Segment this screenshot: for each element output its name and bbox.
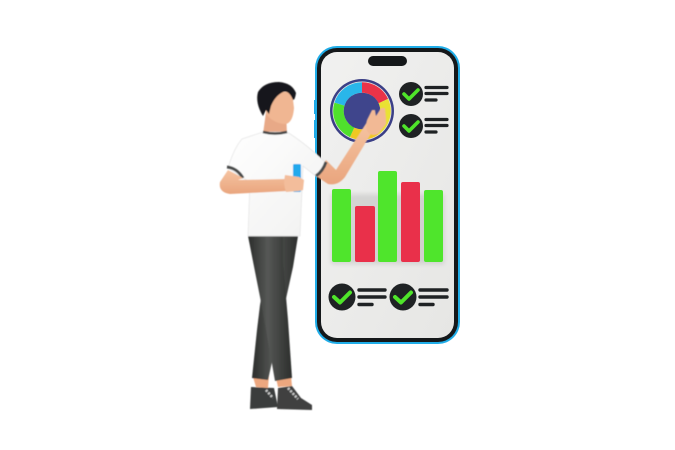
folded arm (220, 170, 288, 194)
phone (314, 46, 460, 344)
back shoe (250, 387, 278, 409)
ankles (253, 375, 292, 388)
check item: top two (399, 114, 447, 138)
phone screen (321, 52, 454, 338)
check item: bottom left (328, 284, 385, 310)
sleeve cuffs (227, 162, 326, 178)
raised hand (366, 108, 386, 135)
small phone in hand (293, 164, 301, 192)
bar shadows (331, 194, 444, 264)
phone black bezel (317, 48, 458, 342)
phone blue case (315, 46, 460, 344)
hair (257, 82, 296, 116)
holding hand (284, 175, 304, 192)
donut segments (338, 87, 385, 134)
person (220, 82, 386, 410)
donut chart (330, 79, 394, 143)
check item: top one (399, 82, 447, 106)
raised arm (316, 122, 375, 184)
front leg (248, 236, 292, 381)
front shoe (277, 386, 312, 410)
bar chart (331, 171, 444, 264)
phone side buttons (314, 100, 460, 166)
phone notch (368, 56, 407, 66)
back leg (252, 236, 298, 380)
check item: bottom right (390, 284, 447, 310)
shoe laces (266, 388, 298, 399)
donut centre (344, 93, 380, 129)
shirt (228, 132, 326, 236)
neck (263, 112, 287, 134)
face (266, 92, 294, 124)
shirt collar (263, 132, 287, 134)
